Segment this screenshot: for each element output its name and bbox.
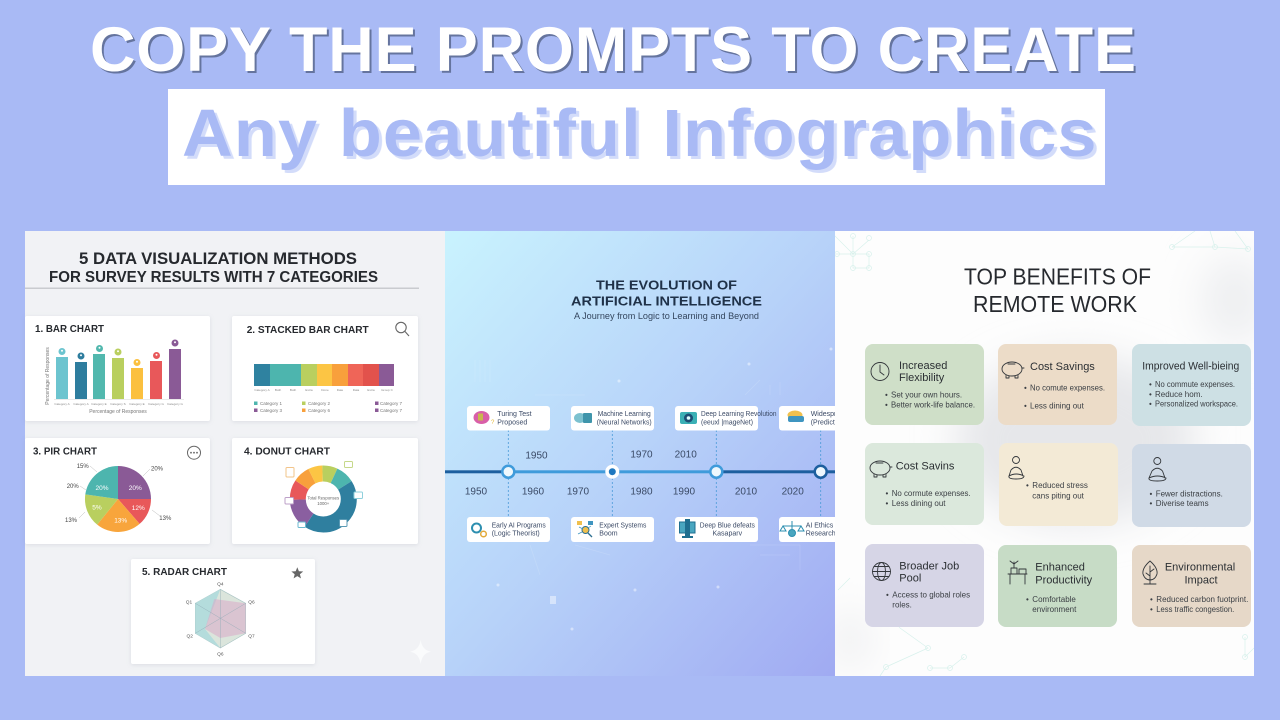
card: broader job pool: Pool [899, 573, 921, 585]
card: environmental impact: Impact [1184, 574, 1218, 586]
card: cost savins [865, 443, 984, 525]
radar chart: Q7 [248, 634, 255, 640]
card: improved well-being [1132, 344, 1251, 426]
bar chart: Category S [110, 402, 126, 406]
card: improved well-being: Reduce hom. [1155, 390, 1203, 399]
card: environmental impact: • [1150, 595, 1153, 604]
icon: monitor chess [680, 519, 695, 538]
icon: magnifier [396, 322, 409, 336]
card title: 3. PIR CHART [33, 446, 98, 458]
bar chart: Category E [91, 402, 107, 406]
stacked bar: Data [353, 388, 360, 392]
icon: meditation [1149, 458, 1166, 481]
icon: network search [577, 521, 593, 537]
pie chart: 20% [129, 485, 142, 492]
event: Widespread: (Predictive [811, 419, 844, 426]
pie chart: 20% [95, 485, 109, 492]
panel heading [571, 278, 762, 321]
legend: Category 6 [308, 408, 331, 413]
card: increased flexibility: Set your own hours. [891, 391, 962, 400]
icon: cloud network [788, 410, 804, 422]
card: donut chart [232, 438, 418, 544]
timeline year labels: 1970 [567, 486, 590, 498]
bar chart: Category A [54, 402, 71, 406]
pie chart: 20% [151, 466, 164, 472]
panel heading [25, 249, 419, 289]
card: environmental impact: • [1150, 605, 1153, 614]
donut centre label [307, 496, 339, 506]
card title: 1. BAR CHART [35, 323, 105, 335]
bar chart: Category G [148, 402, 164, 406]
event: Deep Learning Revolution: (eeuxl |mageNet) [701, 419, 753, 426]
radar chart: Q4 [217, 582, 224, 588]
icon: desk [1008, 561, 1027, 584]
legend [254, 401, 403, 413]
event: Deep Blue [675, 517, 758, 542]
timeline year labels [465, 450, 804, 498]
card: fewer distractions: • [1150, 499, 1152, 508]
timeline node 1950 [502, 466, 514, 478]
icon: scales [780, 521, 804, 536]
timeline node 2020 [815, 466, 827, 478]
icon: clock [871, 362, 889, 380]
card: enhanced productivity: • [1026, 595, 1029, 604]
card: radar chart [131, 559, 315, 664]
event: AI Ethics [779, 517, 835, 542]
panel: top benefits of remote work [830, 231, 1270, 676]
card: improved well-being: • [1149, 380, 1152, 389]
icon: tree [1143, 561, 1157, 584]
card: environmental impact [1132, 545, 1251, 627]
timeline year labels: 2020 [782, 486, 804, 498]
card title: 4. DONUT CHART [244, 446, 331, 458]
panel heading: A Journey from Logic to Learning and Beyond [574, 311, 759, 321]
donut centre label: Total Responses [307, 496, 339, 500]
legend: Category 3 [260, 408, 283, 413]
card: improved well-being: • [1149, 400, 1152, 409]
radar chart: Q2 [186, 634, 193, 640]
stacked bar: Both [290, 388, 296, 392]
timeline year labels: 1950 [465, 486, 488, 498]
card: bar chart [25, 316, 210, 421]
card: broader job pool: Broader Job [899, 560, 959, 572]
timeline year labels: 2010 [675, 450, 697, 460]
card: improved well-being: Personalized workspace. [1155, 400, 1238, 409]
card: broader job pool: Access to global roles [892, 591, 970, 600]
card: cost savings: Cost Savings [1030, 361, 1095, 373]
legend: Category 1 [260, 401, 283, 406]
event: Deep Blue: Kasaparv [713, 531, 743, 538]
event: Early AI Programs [467, 517, 550, 542]
icon: piggy bank [1002, 362, 1024, 378]
panel: evolution of AI timeline [445, 231, 862, 676]
icon: globe [872, 562, 890, 580]
timeline year labels: 1970 [630, 450, 653, 460]
stacked bar: Extra [305, 388, 313, 392]
stacked bar [254, 364, 394, 392]
card: cost savins: • [886, 499, 888, 508]
timeline node 1970 [605, 465, 619, 479]
card: reduced stress: cans piting out [1032, 491, 1085, 500]
timeline year labels: 1960 [522, 486, 545, 498]
donut callout icons [285, 462, 362, 528]
panel heading: REMOTE WORK [973, 291, 1138, 317]
panel heading: THE EVOLUTION OF [596, 278, 737, 292]
event: Turing Test: Proposed [497, 419, 527, 426]
card: cost savings: • [1024, 401, 1027, 410]
event: AI Ethics: Research [806, 531, 836, 538]
card: cost savings [998, 344, 1117, 425]
panel heading: FOR SURVEY RESULTS WITH 7 CATEGORIES [49, 269, 378, 286]
radar chart: Q6 [248, 600, 255, 606]
pie chart: 15% [77, 464, 89, 470]
card title: 2. STACKED BAR CHART [247, 324, 369, 336]
card: fewer distractions [1132, 444, 1251, 527]
event: Early AI Programs: (Logic Theorist) [492, 531, 540, 538]
event: Deep Learning Revolution [675, 406, 777, 430]
stacked bar: Group C [381, 388, 394, 392]
timeline node 1990 [710, 466, 722, 478]
card: broader job pool: roles. [892, 601, 912, 610]
icon: brain: ? [491, 420, 495, 426]
bar chart: Percentage of Responses [45, 347, 51, 405]
card: environmental impact: Less traffic congestion. [1156, 605, 1234, 614]
stacked bar: Date [337, 388, 344, 392]
card: cost savings: Less dining out [1030, 401, 1085, 410]
subtitle banner [168, 89, 1105, 185]
timeline year labels: 1980 [630, 486, 653, 498]
card: enhanced productivity: Comfortable [1032, 595, 1076, 604]
pie chart: 13% [114, 518, 127, 524]
card: cost savings: • [1024, 384, 1027, 393]
icon: star [291, 567, 303, 578]
pie chart: 13% [65, 518, 78, 524]
bar chart: Category A [73, 402, 90, 406]
card: environmental impact: Reduced carbon fuotprint. [1156, 595, 1248, 604]
card: improved well-being: Improved Well-bieing [1142, 360, 1239, 372]
pie chart: 12% [132, 505, 145, 512]
bar chart [45, 340, 184, 415]
panel heading: ARTIFICIAL INTELLIGENCE [571, 294, 762, 308]
donut chart [298, 474, 349, 524]
event: Expert Systems [571, 517, 654, 542]
card: increased flexibility: Increased [899, 360, 947, 372]
card: increased flexibility [865, 344, 984, 425]
panel heading [964, 268, 1150, 312]
card: cost savins: No cormute expenses. [892, 489, 971, 498]
event: Deep Blue: Deep Blue defeats [700, 522, 755, 529]
event: Machine Learning: (Neural Networks) [597, 419, 652, 426]
timeline year labels: 1990 [673, 486, 696, 498]
card: cost savins: Less dining out [892, 499, 946, 508]
card: improved well-being: No commute expenses. [1155, 380, 1235, 389]
stacked bar: Category A [254, 388, 271, 392]
event: Expert Systems: Boom [599, 531, 618, 538]
panel heading: TOP BENEFITS OF [964, 264, 1151, 290]
card: increased flexibility: • [885, 401, 888, 410]
bar chart: Percentage of Responses [89, 409, 147, 415]
radar chart: Q6 [217, 652, 224, 658]
radar chart: Q1 [186, 600, 193, 606]
card: increased flexibility: • [885, 391, 888, 400]
stacked bar: Extra [367, 388, 375, 392]
timeline axis [445, 430, 835, 517]
card: reduced stress: Reduced stress [1032, 481, 1088, 490]
icon: more [188, 446, 200, 459]
card: cost savings: No comute expenses. [1030, 384, 1105, 393]
card: broader job pool: • [886, 591, 889, 600]
decorative sparkle [410, 640, 431, 664]
stacked bar: Done [321, 388, 329, 392]
card: enhanced productivity [998, 545, 1117, 627]
card: fewer distractions: • [1150, 489, 1152, 498]
panel heading: 5 DATA VISUALIZATION METHODS [79, 249, 357, 268]
icon: piggy bank [870, 461, 892, 477]
card: increased flexibility: Better work-life balance. [891, 401, 975, 410]
icon: camera [680, 412, 697, 424]
card: increased flexibility: Flexibility [899, 372, 945, 384]
card: enhanced productivity: Enhanced [1035, 562, 1085, 574]
card: fewer distractions: Fewer distractions. [1156, 489, 1223, 498]
legend: Category 7 [380, 408, 403, 413]
event: Deep Learning Revolution: Deep Learning Revolution [701, 411, 777, 418]
panel: data visualization methods [25, 231, 445, 676]
card: enhanced productivity: Productivity [1035, 574, 1093, 586]
card: enhanced productivity: environment [1032, 605, 1077, 614]
donut centre label: 1000+ [317, 501, 330, 506]
event: Turing Test [467, 406, 550, 430]
event: Turing Test: Turing Test [497, 411, 532, 418]
card: broader job pool [865, 544, 984, 627]
event: Machine Learning: Machine Learning [598, 411, 651, 418]
bar chart: Category E [129, 402, 145, 406]
pie chart [65, 464, 172, 532]
stacked bar: Both [275, 388, 281, 392]
event: Early AI Programs: Early AI Programs [492, 522, 546, 529]
event: Machine Learning [571, 406, 654, 430]
card: environmental impact: Environmental [1165, 562, 1235, 574]
card: cost savins: Cost Savins [896, 461, 955, 473]
icon: meditation [1009, 456, 1024, 479]
event: AI Ethics: AI Ethics & [806, 522, 840, 529]
icon: gears [472, 524, 486, 537]
bar chart: Category G [167, 402, 183, 406]
card: improved well-being: • [1149, 390, 1152, 399]
pie chart: 20% [67, 484, 79, 490]
timeline year labels: 1950 [525, 450, 548, 462]
card: reduced stress: • [1026, 481, 1029, 490]
pie chart: 5% [92, 504, 102, 512]
radar chart [186, 582, 255, 658]
event: Widespread [779, 406, 835, 430]
title: copy the prompts: COPY THE PROMPTS TO CREATE [90, 15, 1136, 85]
icon: chip [574, 413, 592, 423]
timeline year labels: 2010 [735, 486, 758, 498]
card: stacked bar chart [232, 316, 418, 421]
legend: Category 7 [380, 401, 403, 406]
event: Expert Systems: Expert Systems [599, 522, 647, 529]
card: fewer distractions: Diverise teams [1156, 499, 1209, 508]
event: Widespread: Widespread [811, 411, 848, 418]
card: reduced stress [999, 443, 1118, 526]
pie chart: 13% [159, 516, 172, 522]
legend: Category 2 [308, 401, 331, 406]
subtitle text: Any beautiful Infographics [182, 96, 1097, 171]
card: cost savins: • [886, 489, 888, 498]
card: pie chart [25, 438, 210, 544]
card title: 5. RADAR CHART [142, 566, 228, 578]
